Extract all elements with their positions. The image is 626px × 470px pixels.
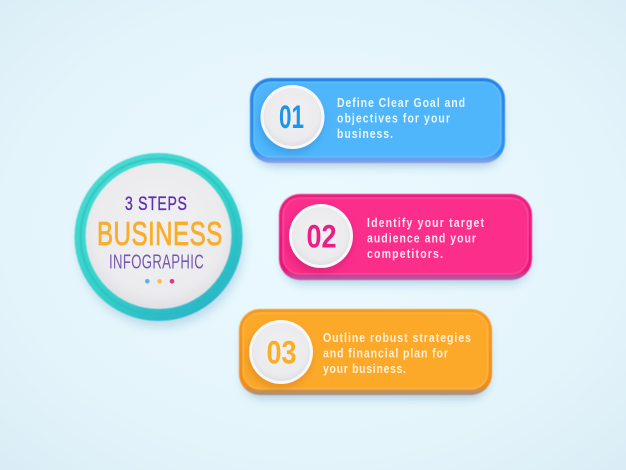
step 3 text	[323, 332, 471, 376]
step 1 card	[250, 78, 505, 163]
step 2 text	[367, 217, 484, 261]
step 2 card	[279, 194, 532, 280]
step 2 number circle: 02	[306, 218, 336, 254]
step 3 text: Outline robust strategies	[323, 332, 471, 345]
step 1 text: business.	[337, 128, 393, 141]
step 1 text: Define Clear Goal and	[337, 97, 465, 110]
panel: step 3	[239, 309, 492, 398]
step 2 number circle	[288, 204, 353, 272]
step 3 number circle	[248, 320, 313, 388]
step 2 text: competitors.	[367, 248, 443, 261]
step 3 text: and financial plan for	[323, 348, 448, 361]
heading: 3 steps: 3 STEPS	[125, 193, 187, 215]
badge teal ring	[74, 153, 242, 321]
step 3 text: your business.	[323, 363, 406, 376]
heading: infographic: INFOGRAPHIC	[109, 249, 204, 273]
step 1 text	[337, 97, 465, 141]
step 1 number circle	[259, 85, 324, 153]
heading: business: BUSINESS	[97, 216, 222, 253]
panel: step 1	[250, 78, 505, 166]
decorative dots row	[145, 279, 174, 284]
badge white disc	[86, 163, 232, 309]
step 3 number circle: 03	[266, 334, 296, 370]
step 1 text: objectives for your	[337, 113, 450, 126]
step 2 text: Identify your target	[367, 217, 484, 230]
panel: title badge	[74, 153, 244, 327]
panel: step 2	[279, 194, 532, 283]
step 3 card	[239, 309, 492, 395]
step 2 text: audience and your	[367, 233, 476, 246]
step 1 number circle: 01	[279, 99, 304, 135]
